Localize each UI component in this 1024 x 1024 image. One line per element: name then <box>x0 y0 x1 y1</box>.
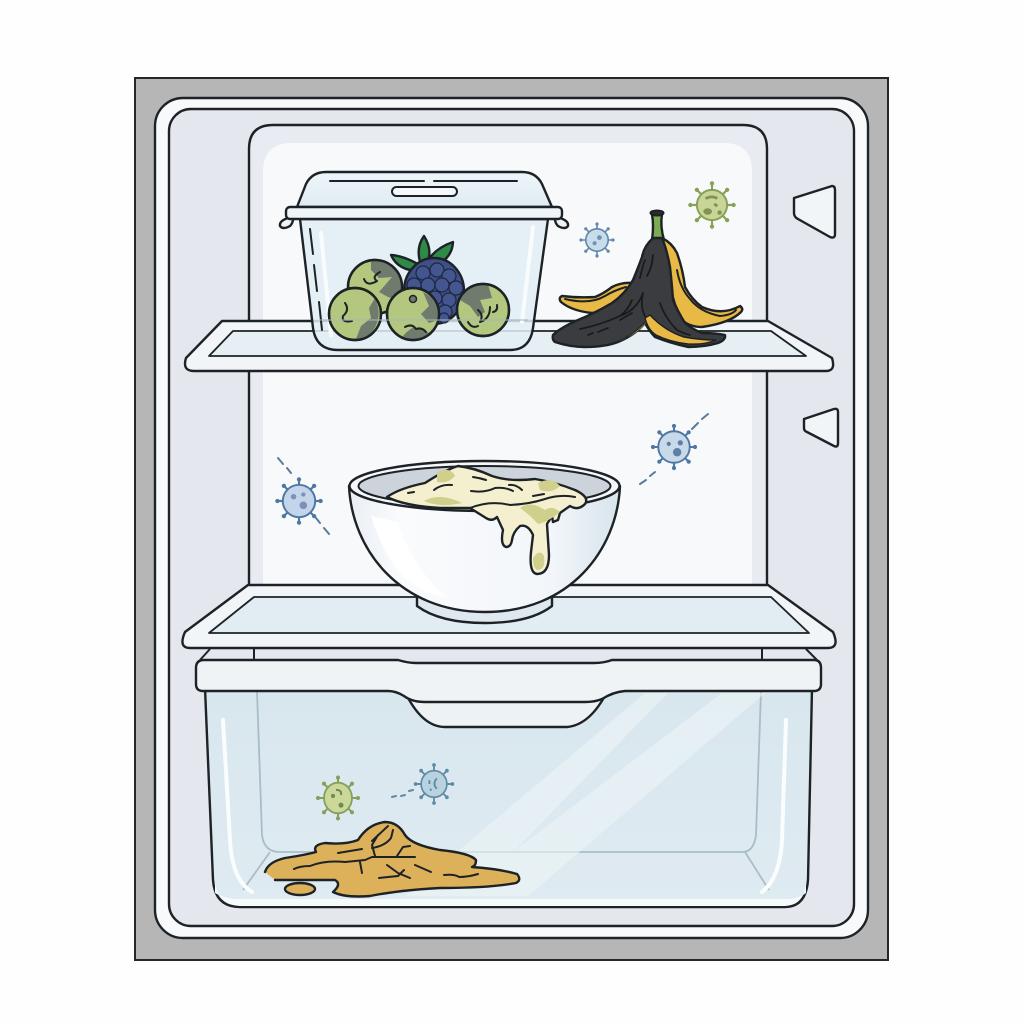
yellow peel left <box>560 283 640 313</box>
glass reflections <box>405 693 765 896</box>
spoiled food <box>387 466 586 574</box>
banana peel folds <box>580 255 690 335</box>
blackberry <box>391 236 464 324</box>
bowl rim <box>350 461 620 511</box>
container lid <box>297 172 552 207</box>
small spill droplet <box>285 883 315 895</box>
glass highlights <box>321 227 533 335</box>
clips <box>280 218 568 228</box>
mold patches on food <box>424 470 560 570</box>
banana stem <box>652 212 664 240</box>
moldy fruit: front left <box>329 288 381 340</box>
bowl body <box>349 486 620 612</box>
food container with moldy fruit <box>280 172 568 350</box>
germ: blue, left <box>277 479 321 523</box>
moldy fruit: front centre <box>387 288 439 340</box>
upper glass shelf <box>185 321 833 371</box>
drawer front lip <box>196 660 821 702</box>
germ: blue, drawer <box>416 765 452 803</box>
drawer side highlights <box>223 720 786 892</box>
germ: blue, mid right <box>653 426 695 468</box>
drawer inner back edges <box>243 691 769 890</box>
moldy fruit: right <box>457 284 509 336</box>
container body <box>300 219 548 350</box>
black peel body <box>553 238 725 347</box>
lid rim <box>286 207 562 219</box>
bowl inside <box>358 466 610 506</box>
motion dashes: drawer germ <box>392 790 413 797</box>
motion dashes: mid right germ <box>640 414 708 484</box>
back wall light panel <box>263 143 752 590</box>
shelf bracket: lower <box>804 409 838 447</box>
shelf bracket: upper <box>794 186 835 238</box>
germ: blue, upper centre <box>581 224 613 256</box>
inner wall <box>169 109 854 926</box>
crisper drawer <box>196 660 821 907</box>
dried spill in drawer <box>265 822 519 896</box>
fridge outer casing <box>135 78 888 960</box>
lower glass shelf <box>182 585 836 648</box>
drawer body <box>205 688 812 907</box>
drawer bottom rim <box>215 882 806 906</box>
banana bottom yellow edges <box>645 315 716 344</box>
bowl highlight <box>371 516 445 597</box>
yellow peel right <box>662 238 742 327</box>
germ: green, upper right <box>690 183 734 227</box>
back compartment <box>249 125 767 590</box>
drawer handle recess <box>405 692 607 727</box>
banana peel <box>553 210 742 347</box>
bowl foot <box>417 596 552 623</box>
motion dashes: left germ <box>278 458 329 534</box>
moldy fruit: back <box>348 260 402 314</box>
drawer supports <box>200 648 817 660</box>
germ: green, drawer <box>318 778 358 818</box>
door seal <box>155 98 868 938</box>
bowl of spoiled food <box>349 461 620 623</box>
